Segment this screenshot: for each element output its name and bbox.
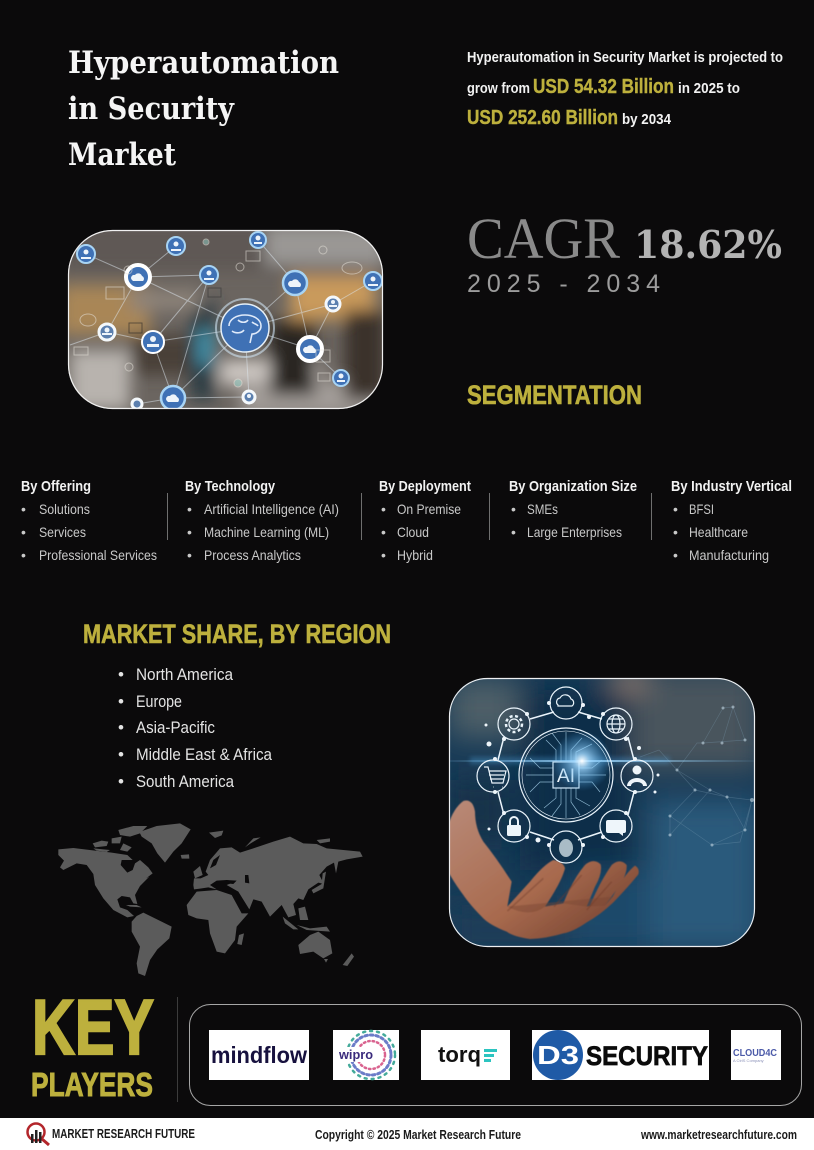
segment: by deployment: • — [381, 547, 386, 563]
market projection text: grow from — [467, 80, 530, 97]
heading: market share by region: MARKET SHARE, BY REGION — [83, 619, 391, 649]
region list — [118, 665, 272, 791]
region list: Asia-Pacific — [136, 718, 215, 737]
CAGR figure: 2025 - 2034 — [467, 270, 660, 298]
segment: by offering: Professional Services — [39, 547, 157, 563]
panel: key player logos — [190, 1004, 802, 1106]
CAGR figure: 18.62% — [634, 222, 782, 267]
hand — [448, 801, 639, 939]
region list: North America — [136, 665, 233, 684]
segment: by offering: • — [21, 547, 26, 563]
segment: by technology — [185, 478, 339, 563]
segment: by organization size: • — [511, 524, 516, 540]
market projection text: USD 54.32 Billion — [533, 76, 674, 98]
AI ring — [477, 687, 653, 863]
footer: MARKET RESEARCH FUTURE — [52, 1127, 195, 1141]
segment: by technology: By Technology — [185, 478, 276, 495]
footer — [0, 1118, 814, 1150]
title: Hyperautomation — [68, 45, 339, 81]
region list: South America — [136, 772, 234, 791]
heading: key players — [31, 983, 154, 1103]
solid icons — [484, 701, 660, 857]
logo: D3 security: D3 — [537, 1040, 579, 1070]
icon details — [484, 695, 625, 787]
segment: by technology: • — [187, 501, 192, 517]
logo: D3 security — [532, 1030, 709, 1080]
logo: wipro — [333, 1030, 399, 1080]
segment: by organization size — [509, 478, 637, 540]
logo: wipro: wipro — [338, 1047, 373, 1062]
segment: by offering: Solutions — [39, 501, 90, 517]
image: hand holding AI icons — [448, 668, 760, 955]
segment: by deployment: • — [381, 524, 386, 540]
market projection text — [467, 49, 783, 129]
image: connected network over blurred crowd — [68, 230, 384, 410]
network nodes — [74, 232, 382, 410]
segment: by deployment: Hybrid — [397, 547, 433, 563]
segment: by offering: • — [21, 524, 26, 540]
logo: mindflow — [209, 1030, 309, 1080]
logo: cloud — [731, 1030, 781, 1080]
segment: by technology: Process Analytics — [204, 547, 301, 563]
AI chip: AI — [557, 766, 575, 787]
region list: • — [118, 745, 124, 764]
circuit traces — [526, 732, 606, 818]
logo: torq: torq — [438, 1042, 481, 1067]
logo: D3 security: SECURITY — [586, 1041, 708, 1071]
segment: by technology: Artificial Intelligence (AI) — [204, 501, 339, 517]
market projection text: by 2034 — [622, 111, 672, 128]
segment: by deployment: • — [381, 501, 386, 517]
title — [68, 45, 339, 173]
CAGR figure: CAGR — [467, 206, 620, 271]
segment: by offering — [21, 478, 157, 563]
segment: by offering: By Offering — [21, 478, 91, 495]
segment: by technology: Machine Learning (ML) — [204, 524, 329, 540]
segment: by industry vertical: Healthcare — [689, 524, 748, 540]
logo: cloud: CLOUD4C — [733, 1048, 777, 1059]
segment: by industry vertical: By Industry Vertical — [671, 478, 792, 495]
market projection text: in 2025 to — [678, 80, 740, 97]
segment: by industry vertical — [671, 478, 792, 563]
segment: by organization size: • — [511, 501, 516, 517]
logo: torq — [421, 1030, 510, 1080]
market projection text: USD 252.60 Billion — [467, 107, 618, 129]
CAGR figure — [467, 206, 782, 298]
heading: key players: KEY — [32, 983, 154, 1071]
heading: key players: PLAYERS — [31, 1066, 153, 1103]
segment: by industry vertical: Manufacturing — [689, 547, 769, 563]
title: in Security — [68, 91, 235, 127]
segment: by industry vertical: • — [673, 547, 678, 563]
segment: by offering: • — [21, 501, 26, 517]
logo: mindflow: mindflow — [211, 1042, 307, 1068]
segment: by industry vertical: • — [673, 524, 678, 540]
segment: by deployment — [379, 478, 471, 563]
network mesh — [640, 707, 752, 845]
segmentation columns — [21, 478, 792, 563]
segment: by organization size: By Organization Size — [509, 478, 637, 495]
segment: by industry vertical: • — [673, 501, 678, 517]
region list: • — [118, 692, 124, 711]
light flare — [449, 760, 755, 762]
segment: by deployment: On Premise — [397, 501, 461, 517]
world map — [58, 823, 363, 976]
heading: segmentation: SEGMENTATION — [467, 380, 642, 410]
AI chip — [553, 762, 579, 788]
region list: Middle East & Africa — [136, 745, 272, 764]
segment: by technology: • — [187, 547, 192, 563]
segment: by industry vertical: BFSI — [689, 501, 714, 517]
segment: by deployment: By Deployment — [379, 478, 471, 495]
segment: by organization size: Large Enterprises — [527, 524, 622, 540]
segment: by offering: Services — [39, 524, 86, 540]
region list: • — [118, 772, 124, 791]
region list: Europe — [136, 692, 182, 711]
segment: by technology: • — [187, 524, 192, 540]
network links — [70, 240, 373, 404]
region list: • — [118, 718, 124, 737]
logo: cloud: A CtrlS Company — [733, 1058, 764, 1063]
segment: by organization size: SMEs — [527, 501, 558, 517]
region list: • — [118, 665, 124, 684]
icon: market research future logo — [28, 1124, 49, 1145]
footer: Copyright © 2025 Market Research Future — [315, 1128, 521, 1142]
segment: by deployment: Cloud — [397, 524, 429, 540]
title: Market — [68, 137, 177, 173]
